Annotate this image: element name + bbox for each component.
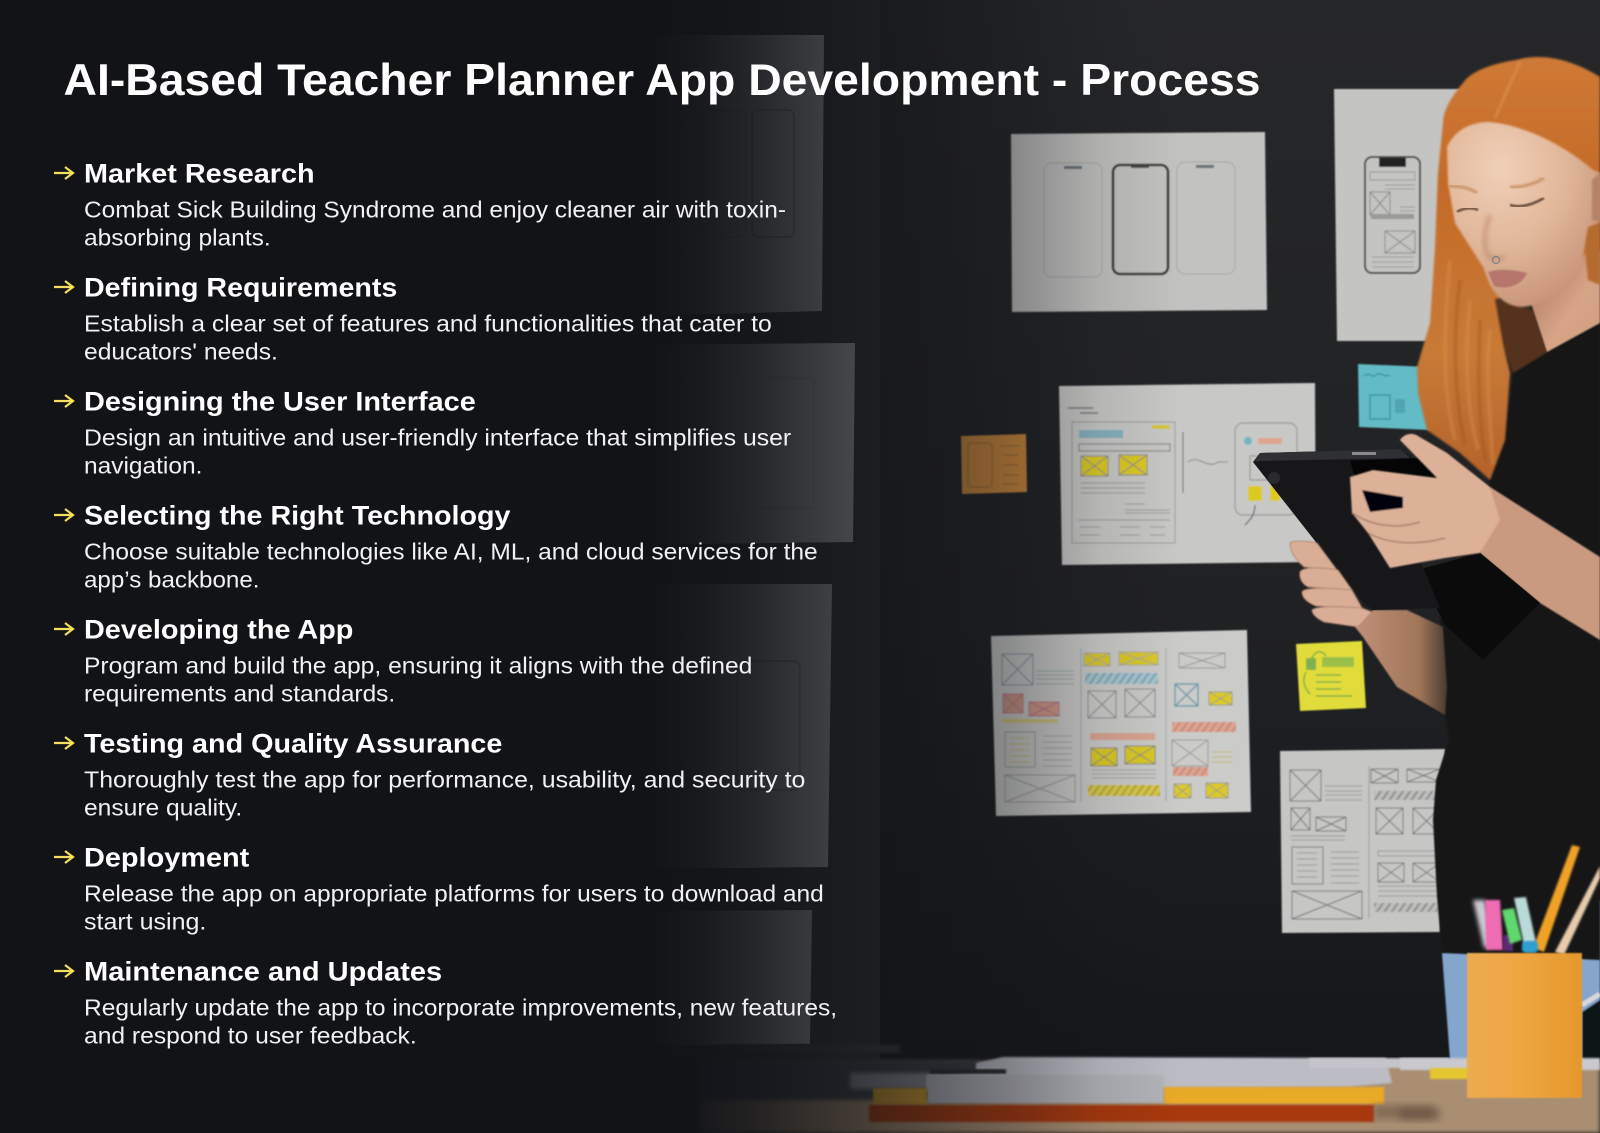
step 5: Developing the App: requirements and standards.	[84, 681, 395, 707]
right hand gripping tablet	[1350, 434, 1500, 568]
sticky note: orange	[961, 434, 1027, 494]
long red hair	[1417, 57, 1600, 480]
step 5: Developing the App: Program and build the app, ensuring it aligns with the defined	[84, 653, 752, 679]
step 8: Maintenance and Updates: Maintenance and Updates	[84, 957, 442, 987]
step 1: Market Research: absorbing plants.	[84, 225, 271, 251]
dark gradient panel behind text	[0, 0, 1180, 1133]
sketch: grey wireframe sheet	[1280, 749, 1445, 933]
arrow icon	[54, 737, 73, 749]
neck	[1530, 250, 1600, 352]
step 1: Market Research	[54, 159, 786, 251]
step 2: Defining Requirements: educators' needs.	[84, 339, 278, 365]
hair behind ear	[1583, 222, 1600, 285]
step 6: Testing and Quality Assurance: ensure quality.	[84, 795, 242, 821]
step 7: Deployment	[54, 843, 824, 935]
step 7: Deployment: start using.	[84, 909, 206, 935]
step 5: Developing the App: Developing the App	[84, 615, 353, 645]
faded paper sheets behind the text panel	[500, 35, 855, 1046]
arrow icon	[54, 395, 73, 407]
step 1: Market Research: Combat Sick Building Syndrome and enjoy cleaner air with toxin-	[84, 197, 786, 223]
right forearm	[1480, 487, 1600, 640]
black t-shirt	[1433, 323, 1600, 960]
step 7: Deployment: Release the app on appropriate platforms for users to download and	[84, 881, 824, 907]
pencil cup with pens	[1467, 845, 1600, 1098]
step 8: Maintenance and Updates: and respond to user feedback.	[84, 1023, 417, 1049]
step 4: Selecting the Right Technology: app’s backbone.	[84, 567, 260, 593]
step 6: Testing and Quality Assurance: Thoroughly test the app for performance, usability, and security to	[84, 767, 805, 793]
step 3: Designing the User Interface: Design an intuitive and user-friendly interface that simplifies user	[84, 425, 791, 451]
arrow icon	[54, 965, 73, 977]
arrow icon	[54, 851, 73, 863]
step 5: Developing the App	[54, 615, 752, 707]
step 3: Designing the User Interface: navigation.	[84, 453, 202, 479]
step 8: Maintenance and Updates	[54, 957, 837, 1049]
sketch: single phone wireframe	[1334, 89, 1470, 341]
list: process steps	[54, 159, 837, 1049]
step 4: Selecting the Right Technology: Selecting the Right Technology	[84, 501, 510, 531]
step 2: Defining Requirements	[54, 273, 772, 365]
arrow icon	[54, 509, 73, 521]
step 4: Selecting the Right Technology	[54, 501, 818, 593]
step 7: Deployment: Deployment	[84, 843, 249, 873]
desk with stacked papers and folders	[700, 1045, 1600, 1133]
left forearm	[1355, 610, 1447, 715]
sticky note: blue	[1358, 364, 1430, 430]
step 2: Defining Requirements: Defining Requirements	[84, 273, 397, 303]
arrow icon	[54, 167, 73, 179]
step 8: Maintenance and Updates: Regularly update the app to incorporate improvements, new features,	[84, 995, 837, 1021]
arrow icon	[54, 623, 73, 635]
step 3: Designing the User Interface	[54, 387, 791, 479]
blue chair	[1442, 900, 1600, 1060]
step 4: Selecting the Right Technology: Choose suitable technologies like AI, ML, and cloud services for the	[84, 539, 818, 565]
step 3: Designing the User Interface: Designing the User Interface	[84, 387, 476, 417]
left hand fingers	[1290, 541, 1372, 627]
sticky note: yellow	[1296, 641, 1366, 711]
face	[1447, 122, 1600, 307]
black flap of tablet case	[1417, 553, 1540, 660]
woman holding tablet	[1253, 57, 1600, 960]
title: AI-Based Teacher Planner App Development - Process	[64, 56, 1260, 105]
step 6: Testing and Quality Assurance	[54, 729, 805, 821]
step 2: Defining Requirements: Establish a clear set of features and functionalities that cater to	[84, 311, 772, 337]
step 6: Testing and Quality Assurance: Testing and Quality Assurance	[84, 729, 502, 759]
arrow icon	[54, 281, 73, 293]
sketch: colored wireframe sheet	[991, 630, 1251, 816]
step 1: Market Research: Market Research	[84, 159, 315, 189]
sketch: web and mobile layout	[1059, 383, 1316, 565]
sketch: three phone outlines	[1011, 132, 1267, 312]
tablet	[1253, 449, 1440, 610]
